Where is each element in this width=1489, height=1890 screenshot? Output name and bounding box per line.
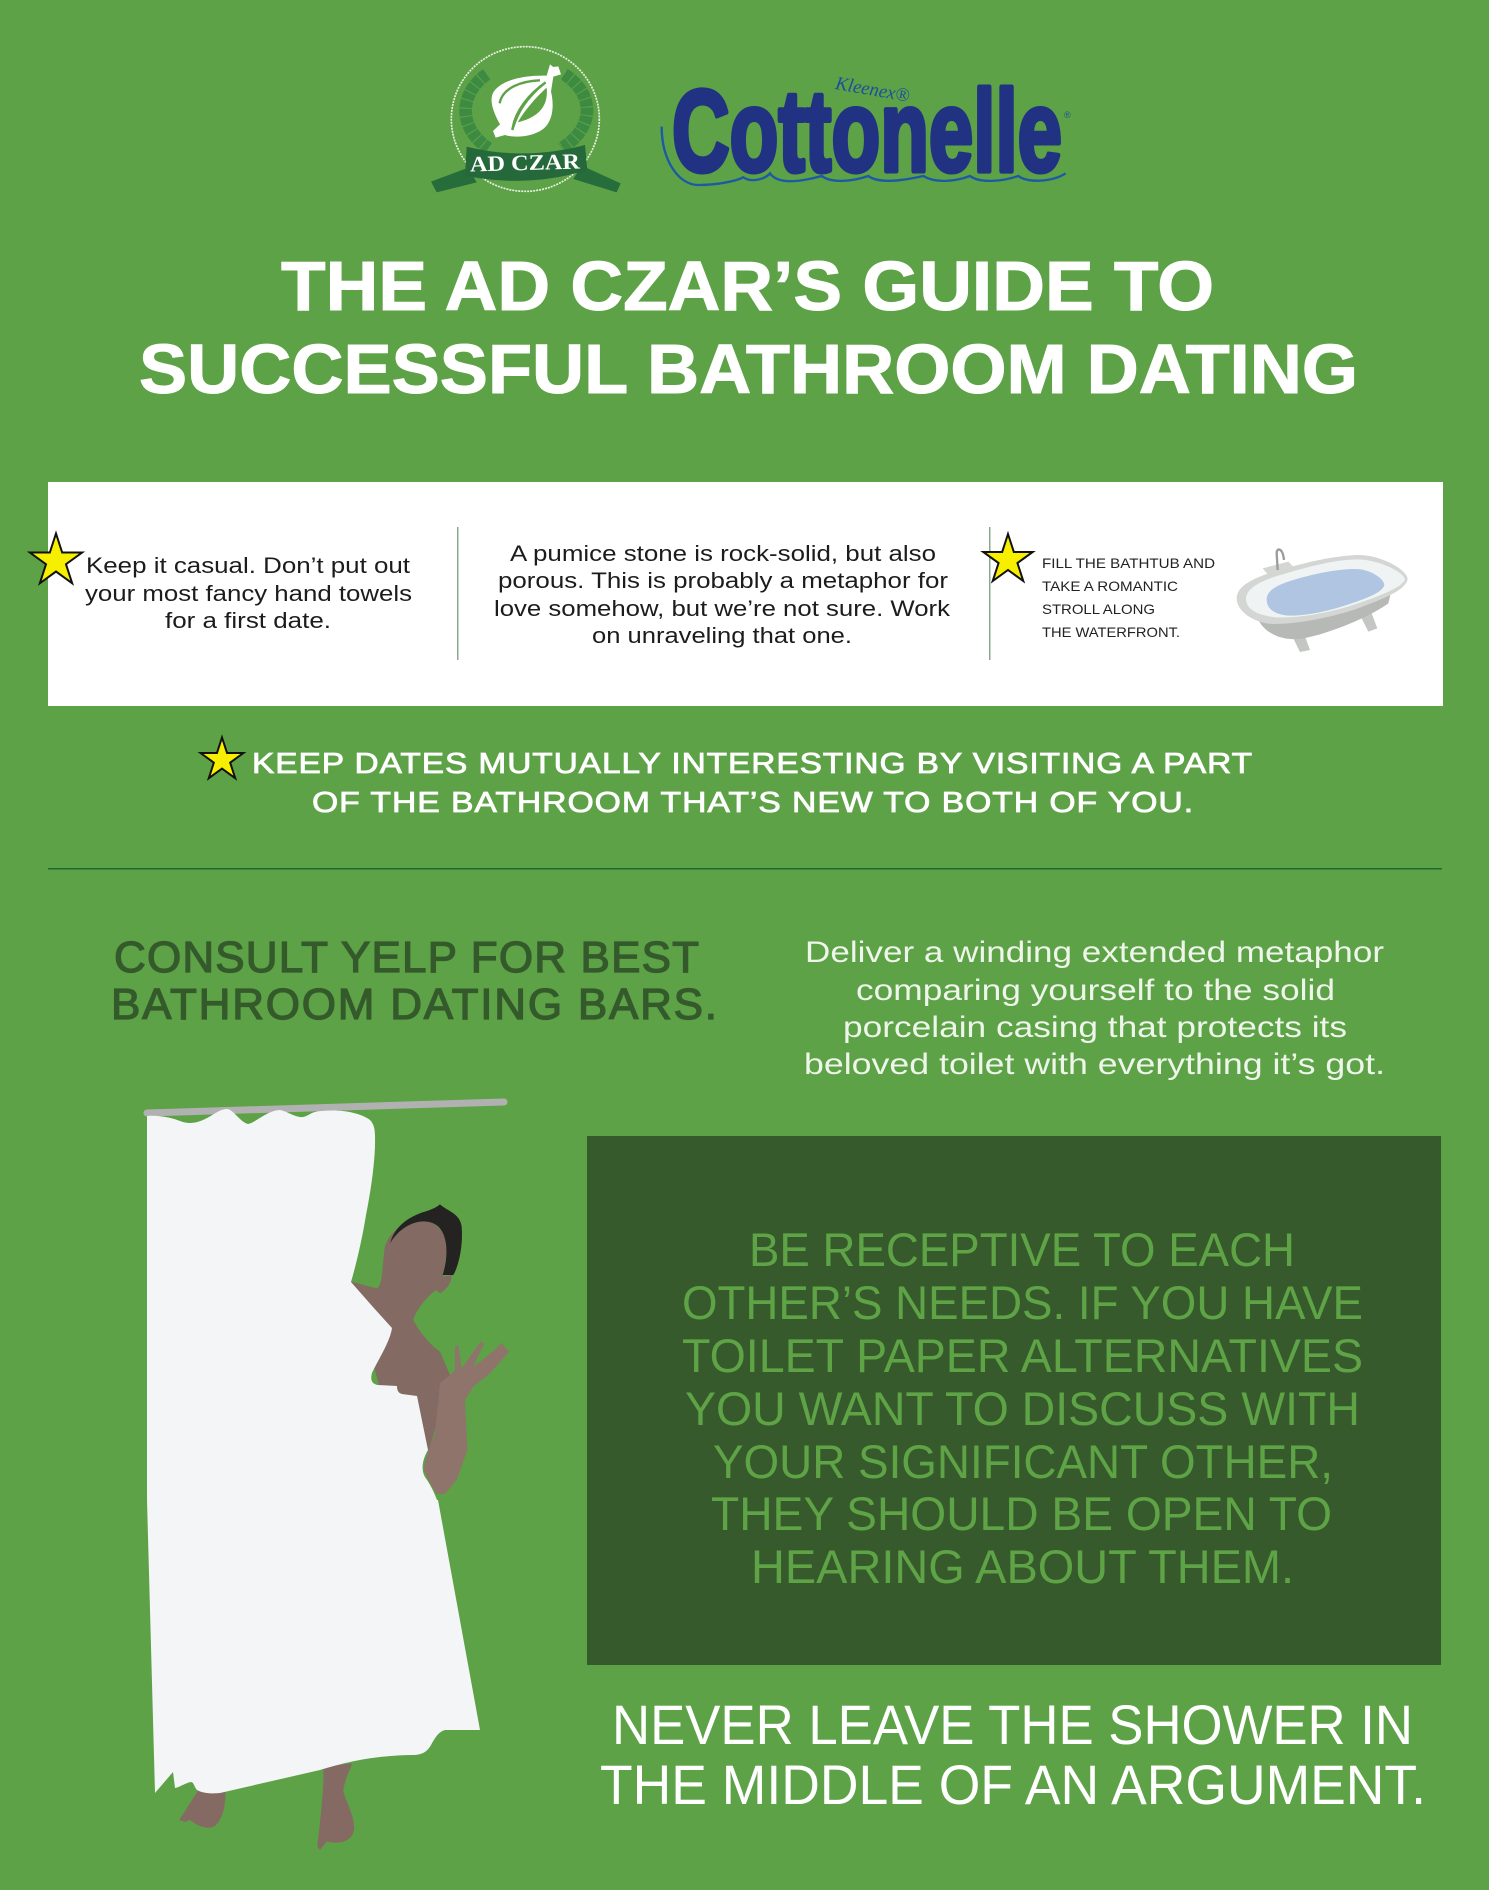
text: deliver a winding metaphor xyxy=(804,936,1385,1081)
logo: Cottonelle: Cottonelle xyxy=(672,66,1062,196)
panel: receptive callout xyxy=(587,1136,1441,1665)
icon: star on keep dates tip xyxy=(201,738,243,778)
logo: Ad Czar badge xyxy=(431,47,621,192)
text: keep dates mutually interesting xyxy=(252,748,1253,819)
arm and hand xyxy=(423,1342,509,1494)
text: deliver a winding metaphor: beloved toilet with everything it’s got. xyxy=(804,1048,1385,1081)
person body xyxy=(351,1204,509,1494)
text: fill the bathtub: FILL THE BATHTUB AND xyxy=(1042,555,1215,571)
icon: star on casual tip xyxy=(30,534,82,583)
panel: white tips strip xyxy=(48,482,1443,706)
title xyxy=(139,247,1358,408)
illustration: person behind shower curtain xyxy=(147,1102,509,1850)
logo: Cottonelle: Kleenex® xyxy=(833,73,911,107)
text: keep dates mutually interesting: OF THE BATHROOM THAT’S NEW TO BOTH OF YOU. xyxy=(312,787,1194,819)
title: SUCCESSFUL BATHROOM DATING xyxy=(139,330,1358,408)
text: pumice stone: on unraveling that one. xyxy=(592,623,852,648)
text: keep it casual: for a first date. xyxy=(165,608,331,633)
callout text: BE RECEPTIVE TO EACH xyxy=(749,1223,1295,1276)
heading: consult yelp: CONSULT YELP FOR BEST xyxy=(114,933,699,982)
callout text xyxy=(682,1223,1363,1593)
text: pumice stone: porous. This is probably a metaphor for xyxy=(498,568,949,593)
hair xyxy=(390,1204,462,1275)
text: fill the bathtub xyxy=(1042,555,1215,640)
callout text: TOILET PAPER ALTERNATIVES xyxy=(682,1329,1363,1382)
text: never leave the shower xyxy=(600,1693,1426,1816)
heading: consult yelp xyxy=(111,933,717,1029)
shower rod xyxy=(147,1102,504,1113)
title: THE AD CZAR’S GUIDE TO xyxy=(281,247,1214,325)
icon: bathtub xyxy=(1237,549,1408,652)
callout text: HEARING ABOUT THEM. xyxy=(751,1540,1294,1593)
text: fill the bathtub: TAKE A ROMANTIC xyxy=(1042,578,1178,594)
feet xyxy=(179,1763,354,1850)
callout text: YOU WANT TO DISCUSS WITH xyxy=(685,1382,1360,1435)
text: keep it casual: Keep it casual. Don’t put out xyxy=(86,553,411,578)
callout text: YOUR SIGNIFICANT OTHER, xyxy=(713,1435,1333,1488)
text: never leave the shower: NEVER LEAVE THE SHOWER IN xyxy=(612,1693,1413,1756)
text: deliver a winding metaphor: Deliver a winding extended metaphor xyxy=(805,936,1384,969)
text: keep it casual xyxy=(85,553,412,633)
logo: Cottonelle xyxy=(662,66,1071,196)
text: pumice stone: A pumice stone is rock-solid, but also xyxy=(510,541,936,566)
curtain xyxy=(147,1109,480,1793)
heading: consult yelp: BATHROOM DATING BARS. xyxy=(111,980,717,1029)
text: keep dates mutually interesting: KEEP DATES MUTUALLY INTERESTING BY VISITING A PART xyxy=(252,748,1253,780)
text: never leave the shower: THE MIDDLE OF AN ARGUMENT. xyxy=(600,1753,1426,1816)
logo: Ad Czar badge: AD CZAR xyxy=(470,149,581,176)
icon: star on bathtub tip xyxy=(983,534,1033,581)
callout text: THEY SHOULD BE OPEN TO xyxy=(711,1487,1332,1540)
logo: Cottonelle: ® xyxy=(1064,110,1071,120)
text: deliver a winding metaphor: comparing yourself to the solid xyxy=(856,974,1335,1007)
text: keep it casual: your most fancy hand towels xyxy=(85,581,412,606)
text: pumice stone xyxy=(494,541,951,648)
text: pumice stone: love somehow, but we’re not sure. Work xyxy=(494,596,951,621)
text: deliver a winding metaphor: porcelain casing that protects its xyxy=(843,1011,1347,1044)
text: fill the bathtub: THE WATERFRONT. xyxy=(1042,624,1180,640)
callout text: OTHER’S NEEDS. IF YOU HAVE xyxy=(682,1276,1363,1329)
text: fill the bathtub: STROLL ALONG xyxy=(1042,601,1155,617)
